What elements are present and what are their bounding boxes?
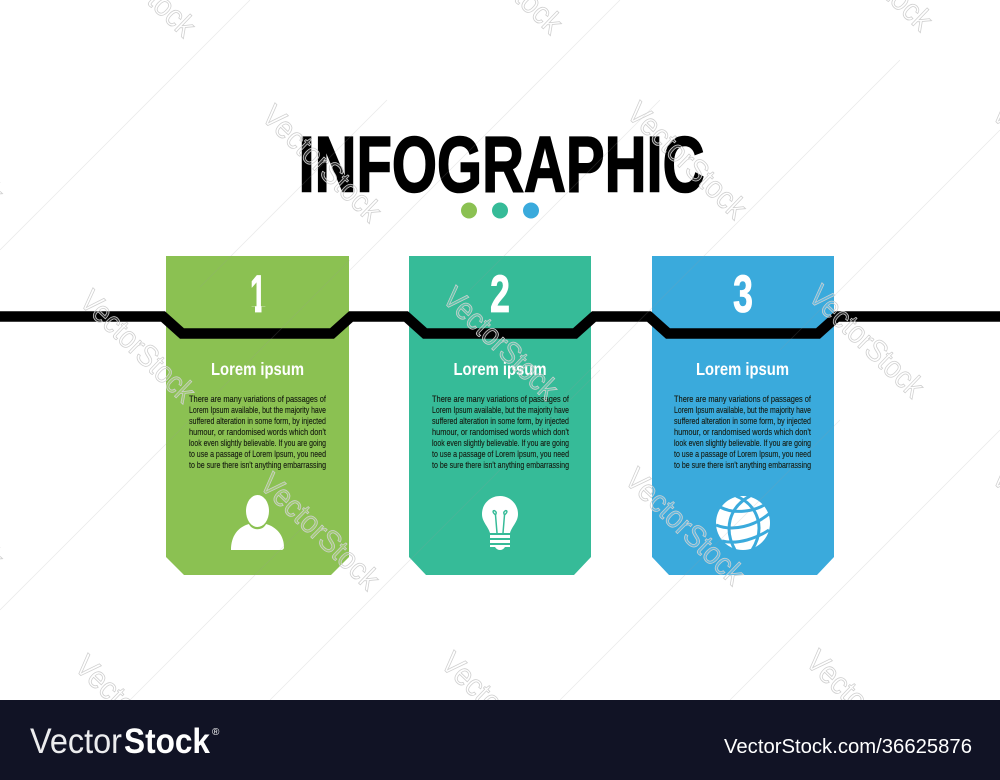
panel: card 3 bbox=[652, 256, 834, 575]
text block 2: Lorem Ipsum available, but the majority have bbox=[432, 404, 569, 415]
watermarks: VectorStock bbox=[802, 278, 932, 405]
text block 1: There are many variations of passages of bbox=[189, 393, 326, 404]
text block 1: suffered alteration in some form, by injected bbox=[189, 415, 326, 426]
heading 1: Lorem ipsum bbox=[211, 359, 304, 379]
text block 1: to use a passage of Lorem Ipsum, you need bbox=[189, 448, 326, 459]
text block 2: suffered alteration in some form, by injected bbox=[432, 415, 569, 426]
title dots bbox=[461, 202, 539, 218]
text block 1: look even slightly believable. If you are going bbox=[189, 437, 326, 448]
text block 1 bbox=[189, 393, 326, 470]
watermarks: VectorStock bbox=[436, 280, 566, 407]
panel: card 1 bbox=[166, 256, 349, 575]
heading 2: Lorem ipsum bbox=[454, 359, 546, 379]
number 1: 1 bbox=[250, 265, 266, 324]
text block 3: There are many variations of passages of bbox=[674, 393, 811, 404]
watermarks: VectorStock bbox=[799, 643, 933, 774]
title: INFOGRAPHIC bbox=[298, 120, 704, 208]
footer logo: Vector bbox=[30, 722, 122, 761]
watermarks: VectorStock bbox=[618, 461, 752, 592]
footer logo bbox=[30, 722, 220, 761]
watermarks: VectorStock bbox=[620, 95, 754, 226]
text block 1: humour, or randomised words which don't bbox=[189, 426, 326, 437]
text block 3: Lorem Ipsum available, but the majority have bbox=[674, 404, 811, 415]
text block 3: to be sure there isn't anything embarrassing bbox=[674, 459, 811, 470]
icon: light bulb bbox=[482, 496, 518, 550]
watermarks: VectorStock bbox=[255, 98, 389, 229]
text block 3 bbox=[674, 393, 811, 470]
text block 2: humour, or randomised words which don't bbox=[432, 426, 569, 437]
text block 2 bbox=[432, 393, 569, 470]
wavy black line bbox=[0, 316, 1000, 334]
icon: globe bbox=[716, 496, 770, 550]
text block 3: to use a passage of Lorem Ipsum, you need bbox=[674, 448, 811, 459]
text block 2: to use a passage of Lorem Ipsum, you need bbox=[432, 448, 569, 459]
icon: person bbox=[231, 494, 284, 550]
number 2: 2 bbox=[490, 265, 510, 324]
text block 2: There are many variations of passages of bbox=[432, 393, 569, 404]
text block 3: humour, or randomised words which don't bbox=[674, 426, 811, 437]
text block 3: suffered alteration in some form, by injected bbox=[674, 415, 811, 426]
text block 2: look even slightly believable. If you are going bbox=[432, 437, 569, 448]
watermarks: VectorStock bbox=[73, 283, 203, 410]
watermarks: VectorStock bbox=[253, 466, 387, 597]
heading 3: Lorem ipsum bbox=[696, 359, 789, 379]
text block 3: look even slightly believable. If you are going bbox=[674, 437, 811, 448]
text block 1: Lorem Ipsum available, but the majority have bbox=[189, 404, 326, 415]
footer logo: ® bbox=[212, 727, 220, 738]
footer url: VectorStock.com/36625876 bbox=[724, 736, 972, 758]
footer bar bbox=[0, 700, 1000, 780]
number 3: 3 bbox=[733, 265, 753, 324]
panel: card 2 bbox=[409, 256, 591, 575]
footer logo: Stock bbox=[124, 722, 210, 761]
text block 1: to be sure there isn't anything embarrassing bbox=[189, 459, 326, 470]
text block 2: to be sure there isn't anything embarrassing bbox=[432, 459, 569, 470]
